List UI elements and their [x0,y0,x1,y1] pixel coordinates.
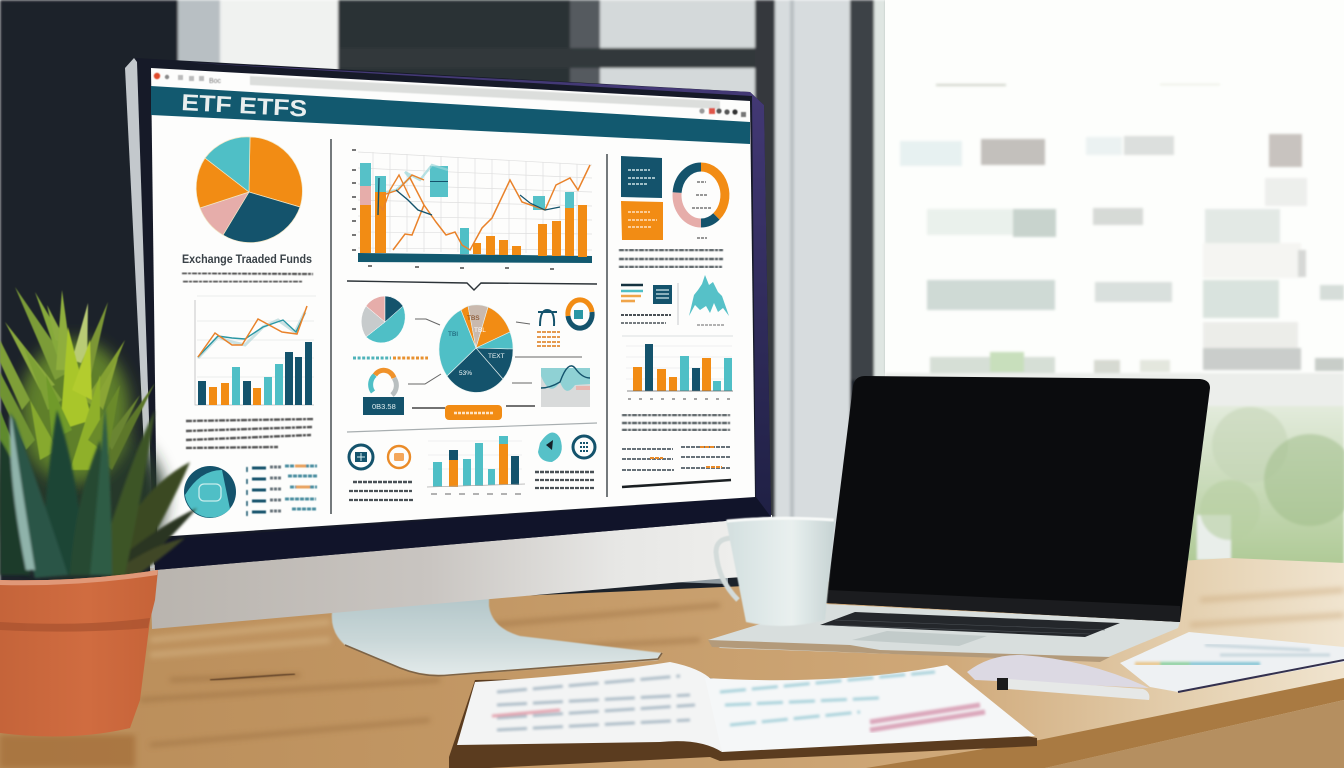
icon: dark coin [349,445,373,469]
dark label box: 0B3.58 [372,402,396,411]
pie labels: TBL [474,327,486,334]
monitor [125,58,772,676]
desk front edge [866,678,1344,768]
distant tree foliage [1180,405,1344,565]
section rule with pointer [347,281,597,290]
notebook chart marks [1135,645,1330,664]
right lower text [622,415,730,430]
area mountain chart [689,275,729,316]
left list [247,466,317,516]
plant leaves: back spikes [0,287,155,490]
coffee mug [716,517,835,626]
pen [997,678,1149,700]
lower section rule [347,423,597,432]
monitor chin [150,515,772,629]
laptop screen [826,376,1210,622]
left page [457,662,722,752]
small pie chart [361,296,405,343]
pie labels: 53% [459,370,472,377]
icon: dark ring [573,436,595,458]
title: ETF ETFS [181,89,308,122]
arch icon and labels [537,310,560,346]
connector lines [408,319,582,408]
laptop base [708,604,1180,661]
subtitle body text [182,273,313,282]
large pie chart [439,305,513,392]
browser toolbar: Boc [209,78,222,85]
donut labels [692,182,712,238]
stat card: orange [621,201,663,240]
plant dark mass [0,340,165,580]
laptop [708,376,1210,662]
browser toolbar [154,73,746,117]
desk surface [0,558,1344,768]
mini bars [621,285,643,301]
potted plant [0,287,197,737]
monitor stand foot shadow [670,574,728,584]
left combo chart [195,296,316,405]
ring icon [371,370,396,395]
header band [151,86,750,144]
donut chart [677,167,725,223]
pie labels: TEXT [488,353,505,360]
mini caption [621,315,725,325]
open notebook [449,662,1037,768]
main combo chart [352,150,592,269]
pie labels [448,315,505,377]
dark label box [363,397,404,415]
pie chart: main [196,137,302,243]
teal circle icon [184,466,236,518]
icon: teal blob [538,433,562,462]
pot shadow on desk [0,735,135,768]
pie labels: TBI [448,331,458,338]
ring gauge icon [568,300,592,328]
right page [705,665,1035,752]
dividers [331,139,607,514]
second notebook with chart [967,632,1344,692]
subtitle: Exchange Traaded Funds [182,254,312,266]
pie labels: TBS [467,315,480,322]
list icon [653,285,672,304]
monitor silver edge [125,58,154,568]
right list [622,447,730,470]
monitor stand [332,596,662,675]
plant pot [0,570,158,737]
icon: orange coin [388,446,410,468]
window view: white building and trees [885,0,1344,570]
trackpad [852,631,987,646]
plant leaves: dark lower blades [0,405,197,580]
monitor bezel [132,58,771,570]
dot row [353,356,428,360]
closing rule [622,480,731,487]
stat card: dark [621,156,662,198]
left body text [186,419,313,448]
small area chart [541,366,590,407]
lower bar chart [427,436,525,494]
keyboard [820,612,1120,637]
caption right [535,472,595,488]
wood knot mark [210,674,295,680]
screen [151,68,755,537]
orange button [445,405,502,420]
right bar chart [626,344,733,399]
icon caption [349,482,413,500]
right body text [619,250,723,267]
